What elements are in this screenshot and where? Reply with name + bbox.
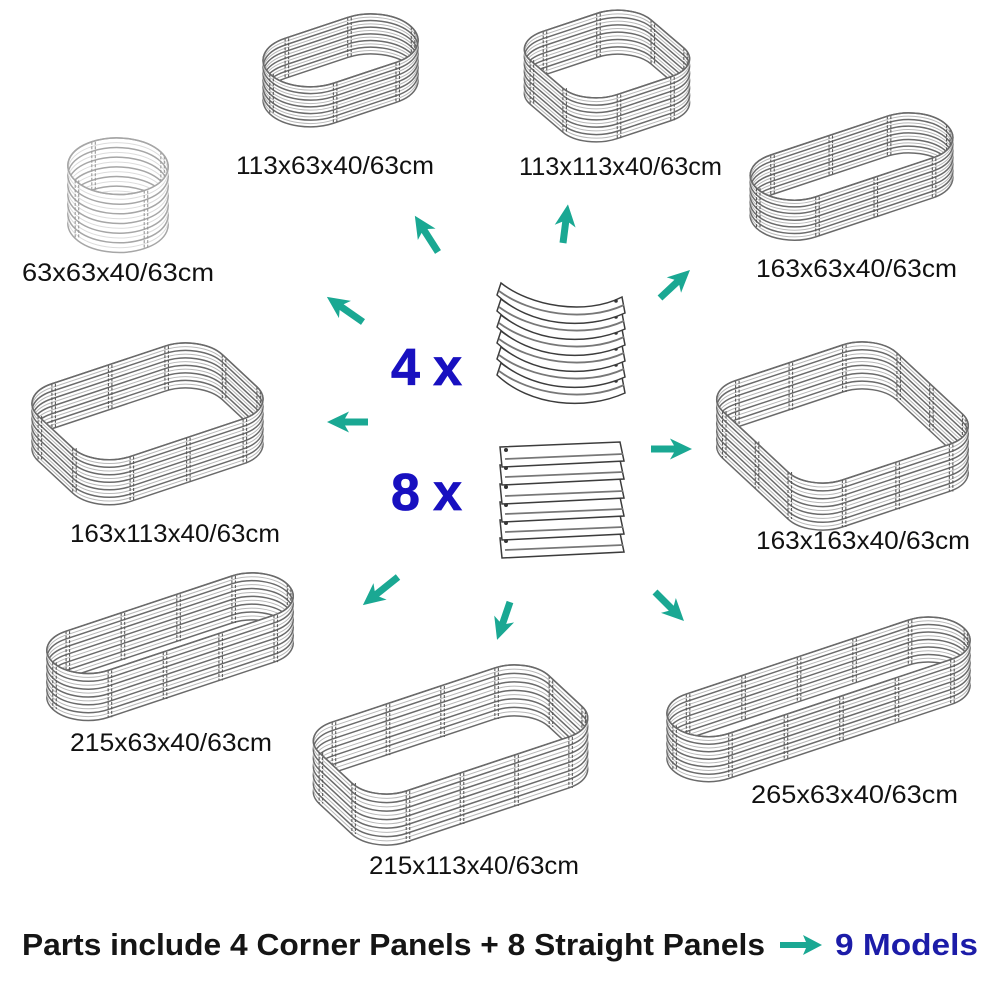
garden bed 215x113 bbox=[312, 664, 588, 846]
quantity: 8 x: 8 x bbox=[391, 464, 462, 522]
garden bed 113x113 bbox=[524, 9, 690, 143]
garden bed 63x63 bbox=[67, 137, 169, 254]
garden bed 163x113 bbox=[31, 342, 264, 506]
label: 215x63: 215x63x40/63cm bbox=[70, 729, 272, 757]
garden bed 215x63 bbox=[46, 572, 294, 722]
label: 215x113: 215x113x40/63cm bbox=[369, 852, 579, 880]
arrow: to 215x113 bbox=[487, 599, 520, 643]
arrow: to 265x63 bbox=[648, 585, 691, 628]
label: 163x63: 163x63x40/63cm bbox=[756, 255, 957, 283]
footer text: 9 models: 9 Models bbox=[835, 927, 978, 962]
quantity: 4 x: 4 x bbox=[391, 339, 462, 397]
footer text: parts include: Parts include 4 Corner Panels + 8 Straight Panels bbox=[22, 927, 765, 962]
label: 113x113: 113x113x40/63cm bbox=[519, 153, 722, 181]
label: 63x63: 63x63x40/63cm bbox=[22, 259, 214, 287]
label: 265x63: 265x63x40/63cm bbox=[751, 781, 958, 809]
arrow: to 63x63 bbox=[321, 288, 369, 331]
arrow: to 163x113 bbox=[327, 412, 368, 432]
garden bed 163x63 bbox=[749, 112, 954, 241]
garden bed 113x63 bbox=[262, 13, 419, 128]
arrow: to 163x63 bbox=[653, 262, 697, 306]
arrow: to 113x63 bbox=[406, 210, 447, 258]
arrow: to 215x63 bbox=[356, 569, 405, 613]
garden bed 163x163 bbox=[716, 341, 969, 531]
label: 163x163: 163x163x40/63cm bbox=[756, 527, 970, 555]
label: 163x113: 163x113x40/63cm bbox=[70, 520, 280, 548]
arrow: to 113x113 bbox=[553, 203, 578, 244]
icon: stack of curved corner panels bbox=[497, 283, 625, 403]
arrow: to 163x163 bbox=[651, 438, 692, 460]
footer arrow bbox=[780, 935, 822, 955]
label: 113x63: 113x63x40/63cm bbox=[236, 152, 434, 180]
garden bed 265x63 bbox=[666, 616, 971, 782]
icon: stack of straight panels bbox=[500, 442, 624, 558]
